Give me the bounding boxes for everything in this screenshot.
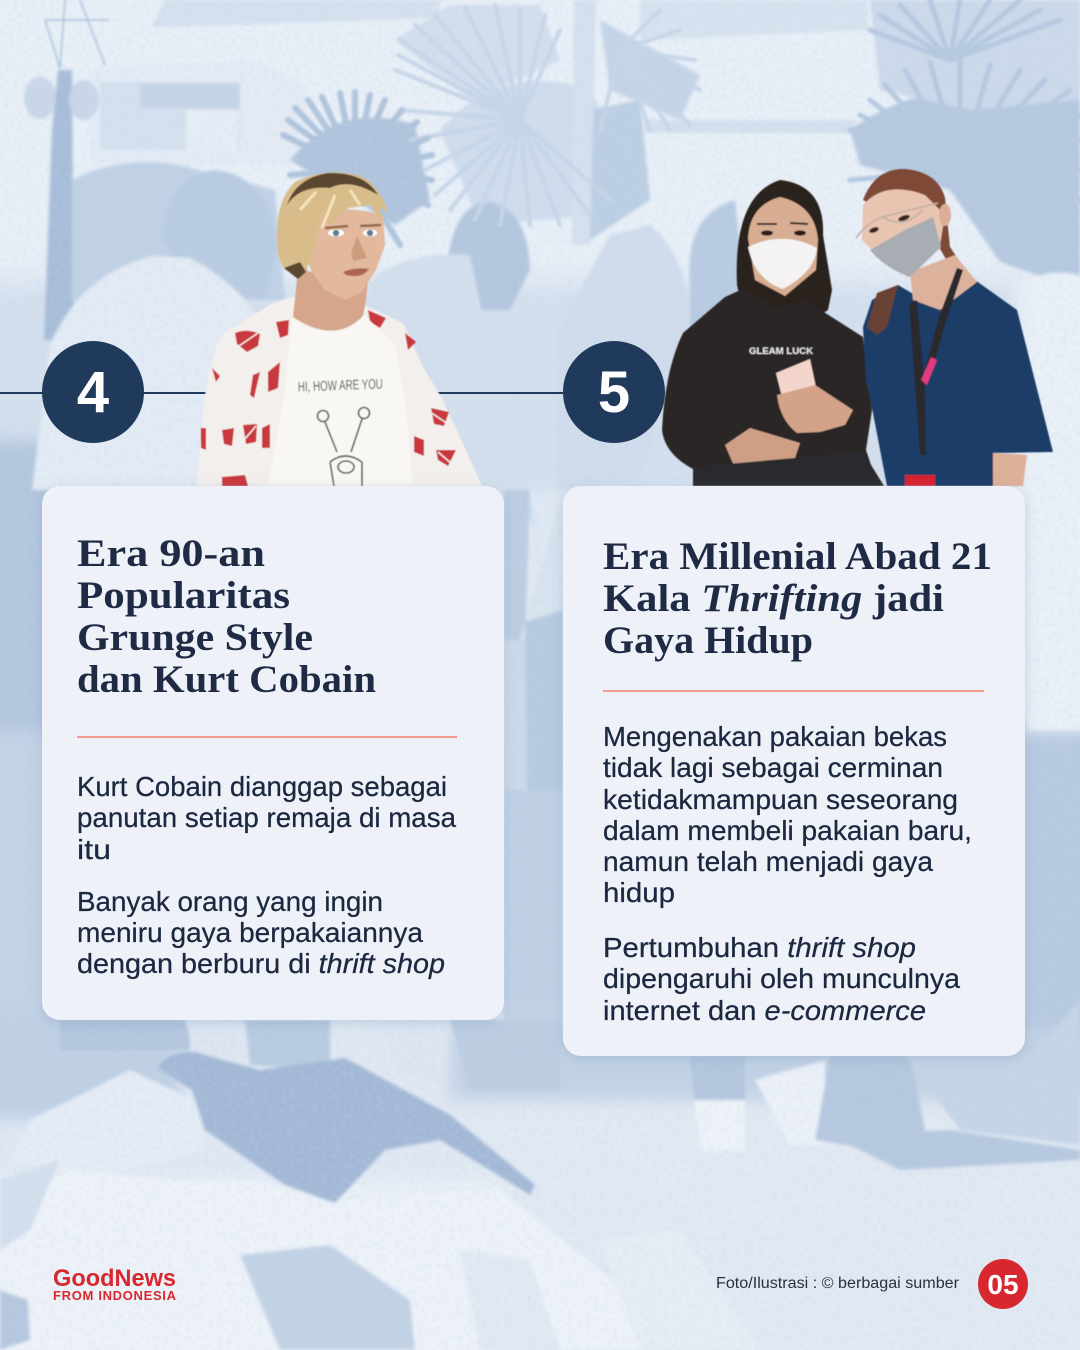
curtains and legs bbox=[690, 1056, 745, 1105]
pole bbox=[572, 0, 596, 245]
left tree bbox=[72, 162, 285, 300]
arm bbox=[993, 453, 1027, 486]
skirt bag bbox=[693, 452, 884, 486]
phone bbox=[776, 359, 817, 397]
neck bbox=[293, 270, 368, 331]
logo: GoodNews from Indonesia: GoodNews bbox=[53, 1265, 176, 1292]
text: gaya hidup: namun telah menjadi gaya bbox=[603, 846, 933, 877]
photo: Kurt Cobain cutout bbox=[197, 172, 482, 486]
lanyard bbox=[909, 268, 963, 455]
text: gaya hidup bbox=[603, 721, 972, 908]
text: meniru gaya: dengan berburu di thrift shop bbox=[77, 948, 445, 979]
text: kurt cobain panutan: itu bbox=[77, 834, 111, 865]
below cards bbox=[60, 1020, 190, 1050]
photo: two women cutout bbox=[662, 169, 1053, 486]
tee girl 2 bbox=[863, 280, 1053, 486]
knit cloth bbox=[10, 1070, 205, 1180]
roofs bbox=[152, 0, 440, 27]
heading: era 90-an: dan Kurt Cobain bbox=[77, 658, 376, 701]
text: gaya hidup: tidak lagi sebagai cerminan bbox=[603, 752, 943, 783]
text: pertumbuhan thrift shop: dipengaruhi oleh munculnya bbox=[603, 963, 960, 994]
page number badge: 05 bbox=[987, 1269, 1019, 1300]
text: meniru gaya bbox=[77, 886, 445, 979]
between cards bbox=[504, 490, 530, 640]
text: gaya hidup: hidup bbox=[603, 877, 675, 908]
heading: era 90-an: Grunge Style bbox=[77, 616, 313, 659]
palm fronds bbox=[45, 0, 1080, 270]
text: pertumbuhan thrift shop bbox=[603, 932, 960, 1026]
step badge 4: 4 bbox=[77, 360, 109, 425]
hair bbox=[277, 172, 388, 278]
mask girl 2 bbox=[870, 217, 941, 277]
jacket bbox=[197, 297, 482, 486]
heading: era millenial bbox=[603, 535, 992, 662]
heading: era 90-an: Era 90-an bbox=[77, 532, 265, 575]
text: pertumbuhan thrift shop: internet dan e-commerce bbox=[603, 995, 926, 1026]
panel: era 90-an bbox=[42, 486, 504, 1020]
dark palm bbox=[290, 118, 430, 225]
right wall line bbox=[645, 120, 855, 133]
cloth bbox=[0, 1170, 700, 1350]
text: kurt cobain panutan bbox=[77, 771, 456, 865]
jacket print bands bbox=[236, 333, 452, 464]
credit: photo source: Foto/Ilustrasi : © berbagai sumber bbox=[716, 1275, 959, 1292]
t-shirt bbox=[268, 314, 413, 486]
text: meniru gaya: Banyak orang yang ingin bbox=[77, 886, 383, 917]
step badge 4 bbox=[42, 341, 144, 443]
bag strap bbox=[867, 285, 898, 335]
step badge 5 bbox=[563, 341, 665, 443]
hair girl 1 bbox=[737, 180, 832, 325]
hair girl 2 bbox=[863, 169, 972, 280]
mask girl 1 bbox=[748, 239, 817, 289]
logo: GoodNews from Indonesia: FROM INDONESIA bbox=[53, 1288, 177, 1303]
text: gaya hidup: ketidakmampuan seseorang bbox=[603, 784, 958, 815]
id badge bbox=[905, 475, 935, 486]
porch bbox=[90, 60, 306, 165]
step badge 5: 5 bbox=[598, 360, 630, 425]
crowd bbox=[162, 170, 277, 300]
dark garment bbox=[158, 1052, 535, 1203]
shirt print: HI, HOW ARE YOU bbox=[298, 376, 383, 394]
face girl 2 bbox=[862, 189, 945, 278]
face bbox=[303, 209, 385, 300]
lamp post bbox=[44, 70, 74, 340]
panel: era millenial bbox=[563, 486, 1025, 1056]
connector line: step 4 bbox=[0, 392, 566, 394]
hands bbox=[777, 385, 853, 433]
text: gaya hidup: Mengenakan pakaian bekas bbox=[603, 721, 947, 752]
text: pertumbuhan thrift shop: Pertumbuhan thrift shop bbox=[603, 932, 916, 963]
hoodie bbox=[662, 288, 878, 486]
face girl 1 bbox=[748, 197, 818, 296]
heading: era 90-an: Popularitas bbox=[77, 574, 290, 617]
text: kurt cobain panutan: Kurt Cobain dianggap sebagai bbox=[77, 771, 447, 802]
photo: two women cutout: GLEAM LUCK bbox=[749, 346, 813, 357]
heading: era millenial: Era Millenial Abad 21 bbox=[603, 535, 992, 578]
heading: era millenial: Kala Thrifting jadi bbox=[603, 577, 944, 620]
text: kurt cobain panutan: panutan setiap remaja di masa bbox=[77, 802, 456, 833]
text: gaya hidup: dalam membeli pakaian baru, bbox=[603, 815, 972, 846]
heading: era millenial: Gaya Hidup bbox=[603, 619, 813, 662]
jacket prints bbox=[201, 310, 456, 486]
neck bbox=[910, 255, 977, 310]
page number badge bbox=[978, 1259, 1028, 1309]
heading: era 90-an bbox=[77, 532, 376, 701]
palm centre crown bbox=[440, 81, 640, 225]
right palm bbox=[850, 85, 1080, 290]
text: meniru gaya: meniru gaya berpakaiannya bbox=[77, 917, 423, 948]
